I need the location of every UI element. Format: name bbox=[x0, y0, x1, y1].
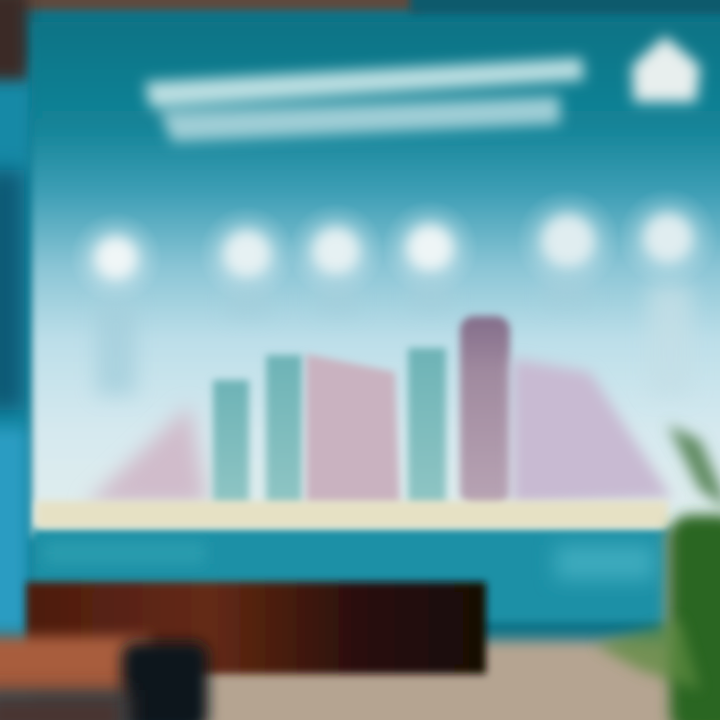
bar: teal 1 bbox=[213, 380, 249, 505]
foreground: left table and dark object bbox=[0, 636, 208, 720]
icon: top right house bbox=[632, 36, 700, 102]
icon: circle 3 bbox=[288, 203, 384, 299]
icon: circle 1 bbox=[70, 212, 162, 304]
baseline strip bbox=[36, 501, 668, 528]
bar: teal 2 bbox=[266, 355, 302, 505]
area: left lilac slope bbox=[85, 405, 208, 505]
icon: circle 4 bbox=[382, 200, 478, 296]
chart: bars and areas bbox=[85, 316, 672, 506]
area: right lilac slope bbox=[512, 358, 672, 505]
plant bbox=[595, 425, 720, 720]
area: center lilac block bbox=[306, 354, 400, 505]
table: dark wood bbox=[26, 582, 486, 674]
icon: circle 2 bbox=[199, 206, 295, 302]
faint captions under icons bbox=[96, 278, 692, 395]
icon: circle 6 bbox=[618, 188, 718, 288]
icon: circle 5 bbox=[516, 189, 620, 293]
chart icons row bbox=[70, 188, 718, 304]
bar: teal 3 bbox=[408, 348, 446, 505]
bar: tall purple bbox=[460, 316, 510, 506]
title bbox=[145, 58, 584, 142]
